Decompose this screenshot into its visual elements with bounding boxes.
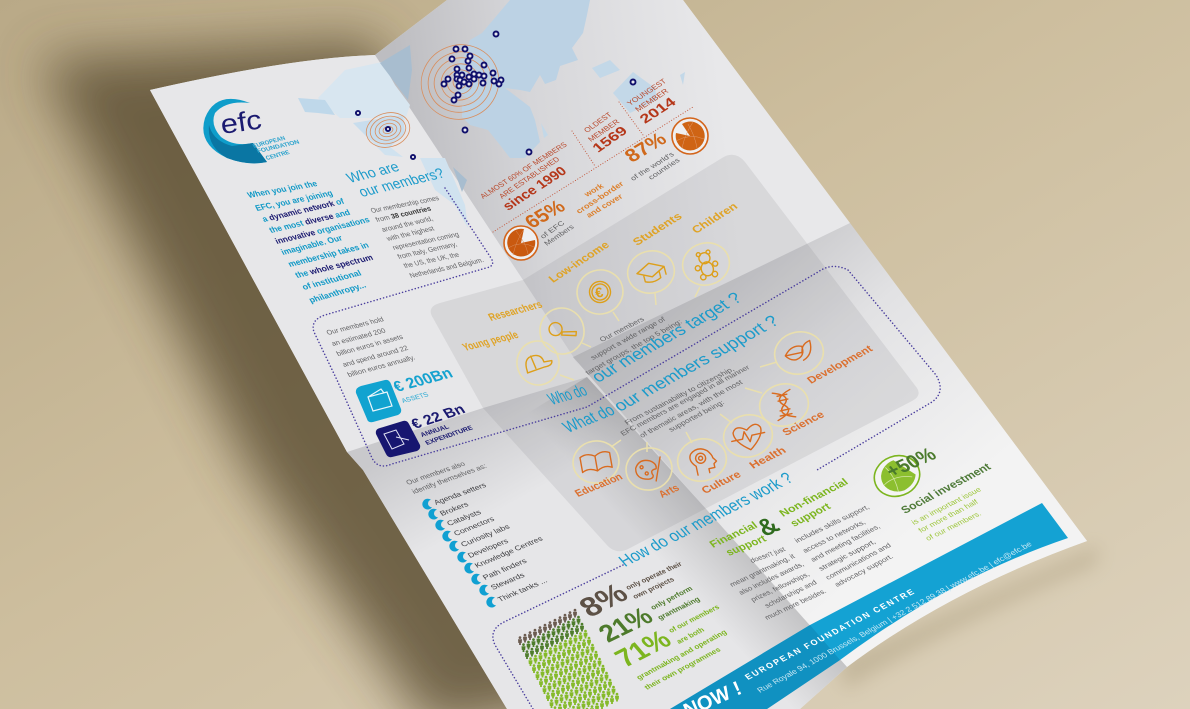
stat: 71 percent: are both: [674, 625, 706, 646]
item: arts: [623, 444, 682, 500]
item: researchers: Researchers: [486, 299, 545, 324]
text: work cross-border: and cover: [584, 192, 625, 219]
intro text: the most diverse and: [267, 207, 352, 235]
heading: what do our members support: What do: [558, 400, 619, 436]
item: education: Education: [573, 471, 625, 499]
band background: [670, 503, 1068, 709]
stat: plus 50 percent: +50%: [881, 444, 941, 482]
map: member location pins: [356, 32, 636, 159]
stat: since 1990: since 1990: [499, 164, 570, 213]
stat: oldest member: OLDEST: [582, 110, 614, 134]
text: support intro: EFC members are engaged in all manner: [619, 364, 752, 438]
map: north america: [298, 62, 468, 228]
connector lines: [560, 287, 700, 380]
stat: 71 percent: grantmaking and operating: [634, 628, 729, 682]
text: non-financial support: advocacy support.: [833, 553, 895, 589]
heading: who do our members target: [544, 288, 746, 409]
stat: 71 percent: of our members: [666, 603, 721, 635]
text: social investment detail: [909, 485, 983, 543]
intro text: philanthropy...: [307, 280, 368, 305]
item: children: [678, 201, 741, 290]
intro text: [246, 178, 375, 305]
text: financial support: doesn't just: [749, 546, 787, 565]
intro text: innovative organisations: [273, 215, 372, 246]
fold zone: middle right: [573, 223, 1087, 667]
item: health: [720, 410, 789, 471]
text: membership description: Our membership comes: [369, 194, 441, 215]
map: europe rings: [411, 34, 509, 130]
stat: 8 percent: [573, 560, 684, 623]
list: member identities: identify themselves as:: [410, 462, 488, 496]
logo swoosh: [203, 99, 267, 163]
heading: what do our members support: [558, 311, 783, 436]
item: development: Development: [805, 343, 876, 386]
item: children: Children: [690, 201, 741, 236]
text: social investment detail: for more than half: [916, 497, 981, 535]
text: financial support: [728, 546, 828, 622]
stat: 87 percent: countries: [647, 157, 682, 181]
text: membership description: the US, the UK, the: [402, 251, 461, 270]
list: member identities: Agenda setters: [432, 481, 488, 507]
heading: who are our members: Who are: [344, 160, 402, 187]
list: member identities: Knowledge Centres: [473, 534, 545, 570]
text: assets description: billion euros in assets: [335, 333, 405, 358]
stat: oldest member: MEMBER: [586, 117, 622, 143]
fold zone: vertical crease shading: [500, 377, 847, 709]
heading: non-financial support: support: [788, 501, 834, 529]
stat: 21 percent: grantmaking: [655, 595, 702, 622]
intro text: When you join the: [246, 178, 319, 200]
list: member identities: Developers: [466, 536, 511, 560]
intro text: of institutional: [300, 268, 363, 292]
stat: oldest member: [582, 110, 631, 155]
item: young people: [461, 329, 563, 388]
list: member identities: [405, 460, 549, 607]
heading: non-financial support: [777, 476, 851, 529]
intro text: imaginable. Our: [279, 233, 345, 257]
text: support intro: From sustainability to citizenship,: [623, 365, 736, 427]
icon: card in hand: [376, 421, 420, 457]
stat: assets: ASSETS: [400, 391, 431, 405]
item: low income: €: [593, 283, 605, 301]
text: membership description: with the highest: [384, 225, 436, 243]
section: social investment: [869, 444, 994, 543]
fold zone: lower left: [347, 377, 847, 709]
heading: who do our members target: Who do: [544, 380, 591, 409]
stat: since 1990: ALMOST 60% OF MEMBERS: [478, 140, 569, 200]
item: science: [756, 379, 827, 438]
logo tagline: FOUNDATION: [256, 139, 301, 155]
heading: who are our members: our members?: [356, 166, 448, 201]
text: financial support: also includes awards,: [737, 561, 806, 597]
stat: youngest member: YOUNGEST: [625, 77, 669, 107]
stat: youngest member: 2014: [636, 94, 679, 126]
logo tagline: CENTRE: [264, 149, 291, 162]
text: financial support: scholarships and: [763, 579, 819, 610]
panel: grey target and support background: [431, 155, 919, 551]
stat: since 1990: ARE ESTABLISHED: [497, 155, 562, 200]
list: member identities: Path finders: [481, 556, 529, 582]
text: support intro: of thematic areas, with the most: [638, 379, 744, 439]
icon: wallet: [356, 380, 401, 422]
text: non-financial support: and meeting facilities,: [809, 523, 882, 564]
ampersand: &: [751, 512, 785, 542]
stat: 71 percent: [608, 603, 729, 692]
footer band: [670, 503, 1068, 709]
heading: financial support: Financial: [707, 520, 760, 550]
stat: 71 percent: their own programmes: [642, 645, 723, 692]
text: social investment detail: is an important issue: [909, 485, 983, 527]
item: students: [623, 211, 685, 298]
band fold shading: [670, 625, 840, 709]
stat: 21 percent: [592, 584, 702, 648]
icon: 50 percent globe: [869, 449, 925, 503]
stat: 87 percent: of the world's: [629, 151, 676, 182]
intro text: a dynamic network of: [260, 196, 346, 224]
panel: top statistics: [478, 77, 708, 260]
icon: 65 percent globe: [504, 226, 538, 260]
chart: people pictogram: [518, 609, 619, 709]
text: financial support: prizes, fellowships,: [749, 571, 811, 604]
stat: 21 percent: only perform: [648, 584, 695, 612]
stat: 65 percent: of EFC: [539, 220, 567, 240]
stat: youngest member: MEMBER: [633, 86, 671, 113]
item: young people: Young people: [461, 329, 521, 354]
list: member identities: Stewards: [489, 571, 527, 592]
text: assets description: Our members hold: [325, 316, 385, 337]
fold zone: top left page: [150, 55, 587, 452]
icon: 87 percent globe: [672, 118, 708, 154]
text: non-financial support: strategic support,: [817, 538, 878, 573]
item: low income: Low-income: [547, 240, 612, 285]
text: target intro: support a wide range of: [589, 316, 667, 361]
text: target intro: Our members: [598, 315, 647, 344]
stat: assets: € 200Bn: [390, 365, 456, 396]
world map: [298, 0, 685, 228]
section: how members operate: [518, 560, 729, 709]
item: culture: Culture: [699, 469, 744, 496]
stat: 87 percent: 87%: [620, 129, 671, 167]
list: member identities: Catalysts: [445, 508, 483, 528]
item: students: Students: [631, 211, 685, 248]
text: membership description: representation coming: [391, 231, 460, 252]
stat: annual expenditure: € 22 Bn: [408, 402, 469, 432]
item: education: [570, 437, 625, 499]
text: financial support: mean grantmaking, it: [728, 553, 797, 589]
map: australia and islands: [541, 60, 685, 138]
stat: 87 percent: [620, 129, 682, 182]
heading: non-financial support: Non-financial: [777, 476, 851, 519]
text: non-financial support: [793, 503, 895, 589]
list: member identities: Think tanks ...: [496, 576, 549, 604]
item: development: [771, 327, 876, 386]
heading: what do our members support: our members support ?: [609, 311, 783, 415]
map: greenland and south america on fold: [380, 45, 467, 192]
dotted dividers: [493, 102, 693, 232]
text: assets description: and spend around 22: [341, 344, 410, 369]
heading: how do our members work: How do our members work ?: [614, 468, 797, 570]
item: low income: [547, 240, 628, 319]
footer: organisation name: EUROPEAN FOUNDATION CENTRE: [743, 587, 916, 682]
text: financial support: much more besides.: [763, 587, 828, 622]
logo wordmark: efc: [219, 105, 263, 140]
section: financial and non-financial support: [707, 476, 895, 622]
section: thematic support: [558, 311, 876, 500]
logo: [203, 99, 301, 163]
list: member identities: Curiosity labs: [459, 522, 512, 549]
stat: annual expenditure: ANNUAL: [419, 424, 451, 439]
stat: annual expenditure: [376, 402, 475, 457]
stat: 65 percent: 65%: [520, 196, 570, 233]
logo tagline: [251, 135, 301, 162]
stat: 71 percent: 71%: [608, 624, 677, 673]
logo swoosh shadow: [209, 125, 267, 163]
text: social investment detail: of our members.: [923, 509, 983, 543]
stat: assets: [356, 365, 456, 422]
text: target intro: target groups, the top 5 being:: [584, 318, 684, 376]
stat: 8 percent: 8%: [573, 578, 635, 623]
list: member identities: Our members also: [405, 460, 467, 487]
text: non-financial support: includes skills support,: [793, 503, 871, 545]
heading: financial support: support: [724, 533, 769, 558]
text: support intro: supported being:: [667, 399, 726, 434]
list: member identities: Brokers: [438, 500, 471, 518]
intro text: membership takes in: [286, 240, 371, 269]
stat: 8 percent: own projects: [631, 576, 676, 601]
item: culture: [674, 434, 744, 496]
connector lines: [611, 362, 777, 452]
text: membership description: Netherlands and Belgium.: [408, 256, 485, 280]
map: north america rings: [362, 108, 414, 152]
stat: 65 percent: Members: [543, 224, 576, 247]
item: researchers: [486, 299, 588, 357]
text: work cross-border: work: [581, 181, 606, 199]
text: membership description: from 38 countries: [374, 205, 433, 224]
logo tagline: EUROPEAN: [251, 135, 287, 150]
text: assets description: [325, 316, 417, 379]
heading: who do our members target: our members target ?: [587, 288, 746, 386]
intro text: the whole spectrum: [293, 252, 375, 280]
stat: annual expenditure: EXPENDITURE: [424, 425, 475, 447]
dotted outlines: [313, 188, 940, 709]
list: member identities: Connectors: [452, 514, 497, 538]
text: assets description: an estimated 200: [330, 327, 387, 348]
text: work cross-border: cross-border: [574, 180, 626, 215]
stat: youngest member: [625, 77, 679, 126]
stat: 65 percent: [520, 196, 576, 247]
footer: contact details: Rue Royale 94, 1000 Brussels, Belgium | +32 2 512 89 38 | www.efc.be | efc@efc.be: [755, 540, 1034, 694]
stat: 21 percent: 21%: [592, 602, 659, 648]
fold zone: top right page: [375, 0, 850, 367]
paper sheet: [150, 0, 1087, 709]
stat: 8 percent: only operate their: [624, 560, 684, 592]
item: science: Science: [780, 409, 827, 438]
text: non-financial support: access to networks,: [801, 519, 867, 555]
heading: financial support: [707, 520, 769, 558]
text: membership description: around the world,: [380, 215, 435, 234]
text: membership description: [369, 194, 485, 280]
stat: oldest member: 1569: [589, 123, 631, 155]
section: target groups: [461, 201, 746, 409]
heading: social investment: Social investment: [899, 461, 994, 516]
item: arts: Arts: [656, 482, 682, 500]
text: non-financial support: communications and: [824, 542, 893, 582]
intro text: EFC, you are joining: [253, 188, 334, 213]
text: membership description: from Italy, Germany,: [396, 241, 459, 261]
map: eurasia and africa: [452, 0, 590, 158]
text: assets description: billion euros annually.: [346, 354, 417, 379]
item: health: Health: [747, 445, 789, 471]
